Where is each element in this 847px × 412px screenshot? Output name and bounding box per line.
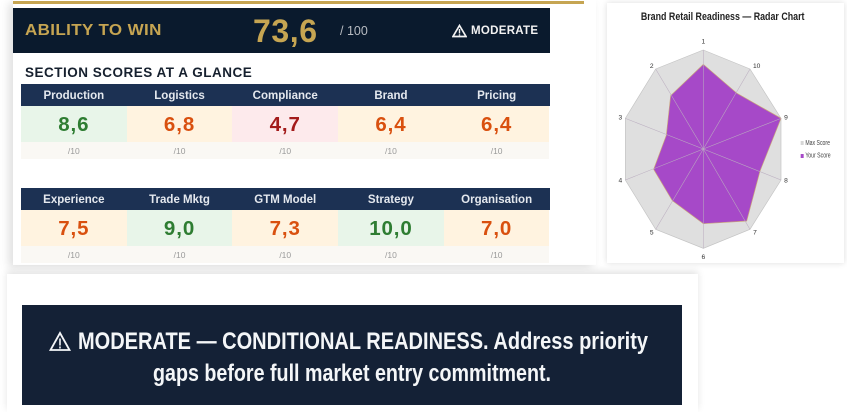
- axis labels: 5: [650, 230, 654, 237]
- axis labels: 3: [618, 115, 622, 122]
- card: compliance: 4,7: [270, 113, 301, 136]
- score banner: [13, 8, 550, 53]
- card: pricing: 6,4: [481, 113, 512, 136]
- card: experience: /10: [68, 250, 80, 260]
- card: production: Production: [43, 90, 104, 102]
- icon: warning triangle: [452, 24, 467, 38]
- score table row two: [21, 188, 550, 263]
- card: logistics: 6,8: [164, 113, 195, 136]
- card: strategy: Strategy: [368, 194, 414, 206]
- axis labels: 1: [701, 39, 705, 46]
- gold top rule: [13, 1, 584, 4]
- card: strategy: 10,0: [369, 217, 413, 240]
- legend: [801, 140, 831, 160]
- card: gtm model: 7,3: [270, 217, 301, 240]
- section heading: SECTION SCORES AT A GLANCE: [25, 65, 252, 80]
- axis labels: 7: [753, 230, 757, 237]
- card: pricing: /10: [491, 146, 503, 156]
- card: brand: /10: [385, 146, 397, 156]
- card: brand: 6,4: [375, 113, 407, 136]
- card: compliance: /10: [279, 146, 291, 156]
- card: organisation: [444, 194, 549, 263]
- legend: Your Score: [805, 153, 831, 160]
- card: experience: [21, 194, 127, 263]
- card: pricing: Pricing: [477, 90, 516, 102]
- axis labels: [618, 39, 788, 261]
- panel: radar chart card: [607, 3, 844, 263]
- card: compliance: Compliance: [253, 90, 318, 102]
- card: compliance: [232, 90, 338, 159]
- card: gtm model: [232, 194, 338, 263]
- card: logistics: Logistics: [154, 90, 205, 102]
- verdict text line two: gaps before full market entry commitment.: [153, 360, 551, 387]
- axis labels: 6: [701, 254, 705, 261]
- axis labels: 2: [650, 63, 654, 70]
- status: moderate: [452, 24, 538, 38]
- card: brand: Brand: [374, 90, 408, 102]
- score denominator: / 100: [340, 24, 368, 38]
- card: brand: [338, 90, 444, 159]
- header bar: [21, 84, 550, 106]
- overall score: 73,6: [253, 13, 318, 49]
- card: strategy: [338, 194, 444, 263]
- max score polygon: [625, 50, 781, 248]
- score table row one: [21, 84, 550, 159]
- legend: Max Score: [805, 140, 830, 147]
- card: trade marketing: Trade Mktg: [149, 194, 210, 206]
- card: organisation: /10: [491, 250, 503, 260]
- radar spokes: [625, 50, 781, 248]
- card: logistics: [127, 90, 232, 159]
- verdict banner: [22, 305, 682, 405]
- card: experience: 7,5: [58, 217, 89, 240]
- card: production: /10: [68, 146, 80, 156]
- icon: warning triangle: [50, 333, 70, 350]
- axis labels: 8: [784, 178, 788, 185]
- radar chart: [618, 11, 831, 261]
- axis labels: 10: [753, 63, 761, 70]
- chart title: Brand Retail Readiness — Radar Chart: [641, 11, 805, 23]
- card: production: 8,6: [58, 113, 89, 136]
- card: production: [21, 90, 127, 159]
- card: pricing: [444, 90, 549, 159]
- card: experience: Experience: [43, 194, 105, 206]
- card: gtm model: /10: [279, 250, 291, 260]
- status text: MODERATE: [471, 25, 538, 37]
- card: trade marketing: [127, 194, 232, 263]
- card: gtm model: GTM Model: [254, 194, 316, 206]
- card: trade marketing: /10: [174, 250, 185, 260]
- card: strategy: /10: [385, 250, 397, 260]
- card: organisation: 7,0: [481, 217, 512, 240]
- panel: ability to win scorecard: [13, 0, 596, 265]
- axis labels: 4: [618, 178, 622, 185]
- card: organisation: Organisation: [461, 194, 532, 206]
- card: logistics: /10: [174, 146, 185, 156]
- header bar: [21, 188, 550, 210]
- card: trade marketing: 9,0: [164, 217, 195, 240]
- panel: verdict: [7, 274, 698, 412]
- banner label: ABILITY TO WIN: [25, 22, 162, 39]
- axis labels: 9: [784, 115, 788, 122]
- your score polygon: [654, 64, 781, 224]
